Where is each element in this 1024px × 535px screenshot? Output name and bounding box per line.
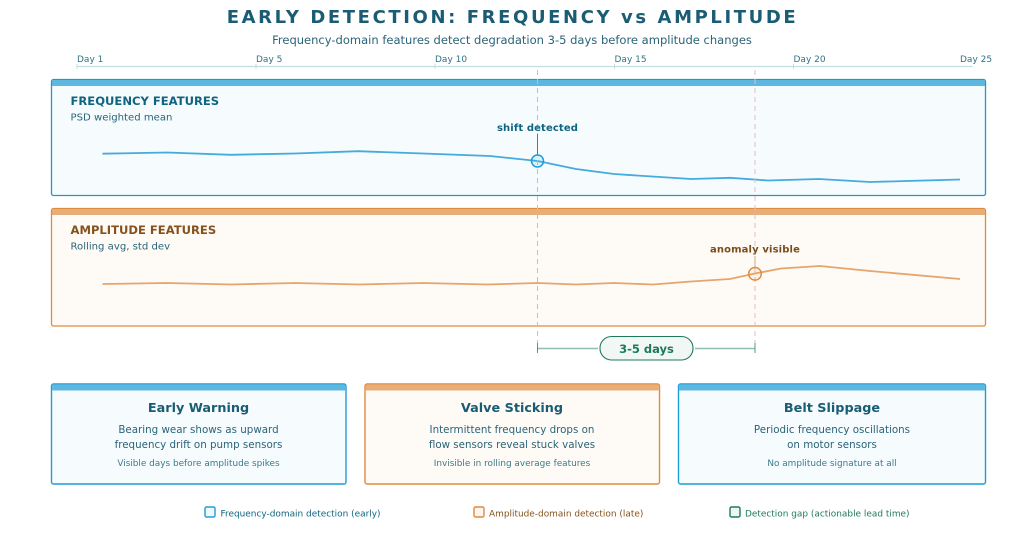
callout: shift detected: shift detected <box>497 123 578 134</box>
timeline axis <box>77 55 992 69</box>
timeline axis: Day 5 <box>256 55 282 65</box>
gap bracket: 3-5 days: 3-5 days <box>619 342 674 356</box>
timeline axis: Day 1 <box>77 55 103 65</box>
callout: anomaly visible: anomaly visible <box>710 244 800 256</box>
card: valve sticking: Invisible in rolling average features <box>434 459 591 469</box>
callout: shift detected <box>497 123 578 167</box>
title: EARLY DETECTION: FREQUENCY vs AMPLITUDE <box>227 7 798 28</box>
sublabel: rolling avg: Rolling avg, std dev <box>70 242 170 252</box>
marker line: frequency detection day <box>536 70 538 348</box>
panel: frequency features <box>52 80 986 196</box>
line: amplitude trend <box>102 266 960 284</box>
legend: frequency-domain detection: Frequency-domain detection (early) <box>220 510 380 520</box>
line: frequency trend <box>102 151 960 182</box>
card: belt slippage: on motor sensors <box>787 439 877 451</box>
timeline axis: Day 20 <box>794 55 826 65</box>
timeline axis: Day 15 <box>614 55 647 65</box>
card: belt slippage: No amplitude signature at all <box>767 459 897 469</box>
legend: amplitude-domain detection: Amplitude-domain detection (late) <box>489 510 643 520</box>
card: early warning: Early Warning <box>148 401 249 416</box>
marker line: amplitude detection day <box>754 70 756 348</box>
card: early warning <box>52 384 346 484</box>
timeline axis: Day 25 <box>960 55 992 65</box>
panel: amplitude features <box>52 208 986 326</box>
card: belt slippage <box>678 384 986 484</box>
legend: detection gap: Detection gap (actionable lead time) <box>745 510 910 520</box>
callout: anomaly visible <box>710 244 800 280</box>
card: early warning: frequency drift on pump sensors <box>115 439 282 451</box>
card: valve sticking: flow sensors reveal stuck valves <box>429 439 595 451</box>
card: valve sticking: Valve Sticking <box>461 401 563 416</box>
card: valve sticking <box>365 384 660 484</box>
card: belt slippage: Periodic frequency oscillations <box>754 424 910 436</box>
card: early warning: Bearing wear shows as upward <box>118 424 279 436</box>
sublabel: psd weighted mean: PSD weighted mean <box>70 112 172 124</box>
timeline axis: Day 10 <box>435 55 467 65</box>
heading: amplitude features: AMPLITUDE FEATURES <box>70 223 216 237</box>
subtitle: Frequency-domain features detect degradation 3-5 days before amplitude changes <box>272 33 752 47</box>
gap bracket: 3-5 days <box>538 336 755 360</box>
card: belt slippage: Belt Slippage <box>784 401 880 416</box>
heading: frequency features: FREQUENCY FEATURES <box>70 94 219 108</box>
card: valve sticking: Intermittent frequency drops on <box>430 424 594 436</box>
card: early warning: Visible days before amplitude spikes <box>117 459 280 469</box>
